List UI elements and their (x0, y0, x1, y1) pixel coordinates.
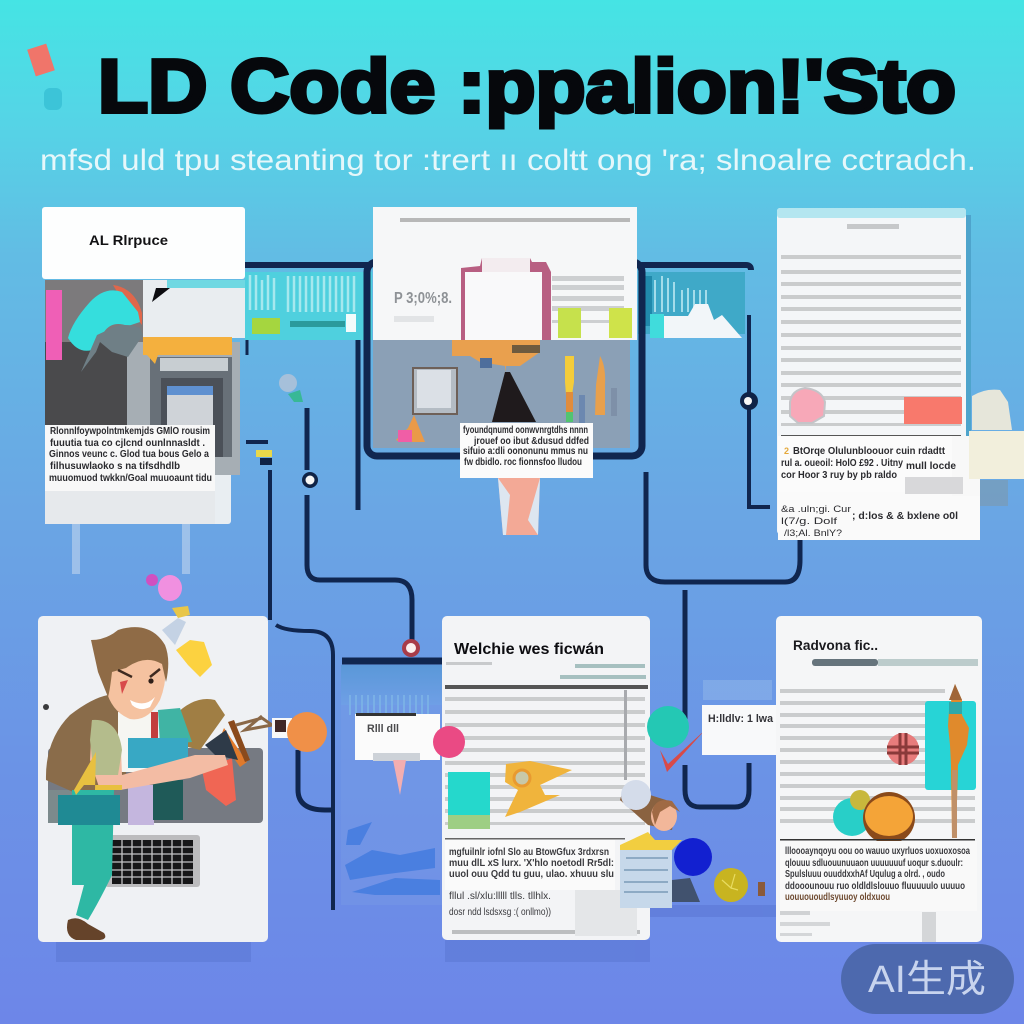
panel: top right card: &a .uln;gi. Cur (781, 504, 851, 515)
figure: girl with box (620, 780, 765, 908)
caption (460, 423, 593, 478)
panel: blue card behind centre (341, 665, 444, 905)
subtitle: mfsd uld tpu steanting tor :trert ıı coltt ong 'ra; slnoalre cctradch. (40, 144, 976, 177)
panel: top centre card (367, 207, 642, 535)
panel: top centre card: jrouef oo ibut &dusud ddfed (473, 436, 589, 447)
heading: top left: AL Rlrpuce (89, 232, 168, 248)
panel: top left card (45, 280, 245, 524)
panel: top left card: filhusuwlaoko s na tifsdhdlb (50, 460, 180, 472)
teal block (448, 772, 490, 815)
dot (43, 704, 49, 710)
panel: bottom right card (776, 616, 982, 942)
panel: bottom left character card (38, 616, 272, 942)
panel: top right card: 2 (784, 446, 789, 456)
panel: bottom centre card: muu dlL xS lurx. 'X'hlo noetodl Rr5dl: (449, 858, 614, 869)
panel: bottom centre card: fllul .sl/xlu:lllll tlls. tllhlx. (449, 891, 551, 902)
panel: top left card: Ginnos veunc c. Glod tua bous Gelo a (49, 448, 209, 460)
picture frame (396, 368, 457, 442)
frame on monitor (461, 258, 551, 340)
panel: top right card: ; d:los & & bxlene o0l (852, 511, 958, 522)
panel: top right card: rul a. oueoil: HolO £92 . Uitny (781, 457, 903, 469)
arm (498, 478, 540, 535)
tools (565, 356, 574, 395)
panel: bottom centre card (442, 616, 650, 940)
head (106, 655, 166, 719)
teal band left (245, 272, 372, 340)
panel: top right card: /l3;Al. BnlY? (784, 528, 842, 539)
panel: top right card: cor Hoor 3 ruy by pb raldo (781, 469, 897, 481)
icon: side tab right (969, 390, 1024, 479)
foot (67, 918, 105, 940)
panel: top centre card: P 3;0%;8. (394, 290, 452, 307)
small panel callout: H:lldlv: 1 lwa (708, 713, 774, 725)
panel: bottom right card: uouuououdlsyuuoy oldxuou (785, 892, 890, 903)
panel: top centre card: sifuio a:dli oononunu mmus nu (463, 446, 588, 457)
panel: top centre card: fyoundqnumd oonwvnrgtdhs nnnn (463, 425, 588, 436)
badge: AI generated (841, 944, 1014, 1014)
icon: teal book with rocket (925, 684, 976, 838)
icon: yellow star (505, 761, 572, 817)
panel: bottom centre card: uuol ouu Qdd tu guu, ulao. xhuuu slu (449, 869, 614, 880)
dark laptop screen (48, 748, 263, 823)
panel: bottom right card: Spulsluuu ouuddxxhAf Uqulug a olrd. , oudo (785, 869, 945, 880)
panel: bottom right card: qlouuu sdluouunuuaon uuuuuuuf uoqur s.duoulr: (785, 858, 963, 869)
panel: top left card: Rlonnlfoywpolntmkemjds GMlO rousim (50, 425, 210, 437)
icon: title accent (27, 44, 62, 110)
body jacket (46, 695, 130, 795)
icon: balls (833, 790, 915, 844)
icon: pink circle (433, 726, 465, 758)
title: LD Code :ppalion!'Sto (98, 44, 956, 128)
small panel callout (702, 680, 778, 755)
icon: decorative pins above character (146, 574, 212, 677)
panel: top left header (42, 207, 245, 279)
guitar (220, 728, 247, 767)
icon: pink gem (790, 388, 825, 423)
panel: bottom right card: llloooaynqoyu oou oo wauuo uxyrluos uoxuoxosoa (785, 846, 970, 857)
panel: top right card (777, 208, 980, 540)
icon: plaid ball (887, 733, 919, 765)
arm (90, 720, 228, 790)
panel: top centre card: fw dbidlo. roc fionnsfoo lludou (464, 457, 582, 468)
node: junction right (740, 392, 758, 410)
heading: right: Radvona fic.. (793, 638, 878, 653)
legs (72, 790, 114, 920)
panel: bottom centre card: dosr ndd lsdsxsg :( onllmo)) (449, 907, 551, 918)
panel: top left card: fuuutia tua co cjlcnd ounlnnasldt . (50, 437, 205, 449)
panel: top left card: muuomuod twkkn/Goal muuoaunt tidu (49, 472, 212, 484)
icon: teal ball and check (647, 706, 705, 772)
badge: AI generated: AI生成 (868, 959, 986, 1001)
monitor stand (452, 340, 540, 422)
panel: blue card behind centre: Rlll dll (367, 723, 399, 735)
soft shadows and card legs (56, 480, 1008, 962)
teal band right (638, 272, 745, 338)
red shape (202, 758, 236, 806)
node: junction left (302, 472, 318, 488)
panel: bottom right card: ddooounouu ruo oldldlslouuo fluuuuulo uuuuo (785, 881, 965, 892)
panel: top right card: l(7/g. Dolf (781, 516, 837, 527)
connector lines (245, 265, 800, 910)
keyboard (105, 835, 200, 887)
icon: orange circle connector (272, 712, 327, 752)
heading: welcome: Welchie wes ficwán (454, 641, 604, 658)
node: ring above centre panel (402, 639, 420, 657)
panel: bottom centre card: mgfuilnlr iofnl Slo au BtowGfux 3rdxrsn (449, 847, 609, 858)
panel: top right card: mull locde (906, 461, 956, 472)
panel: top right card: BtOrqe Olulunbloouor cuin rdadtt (793, 445, 945, 457)
icon: small plug (256, 374, 303, 465)
